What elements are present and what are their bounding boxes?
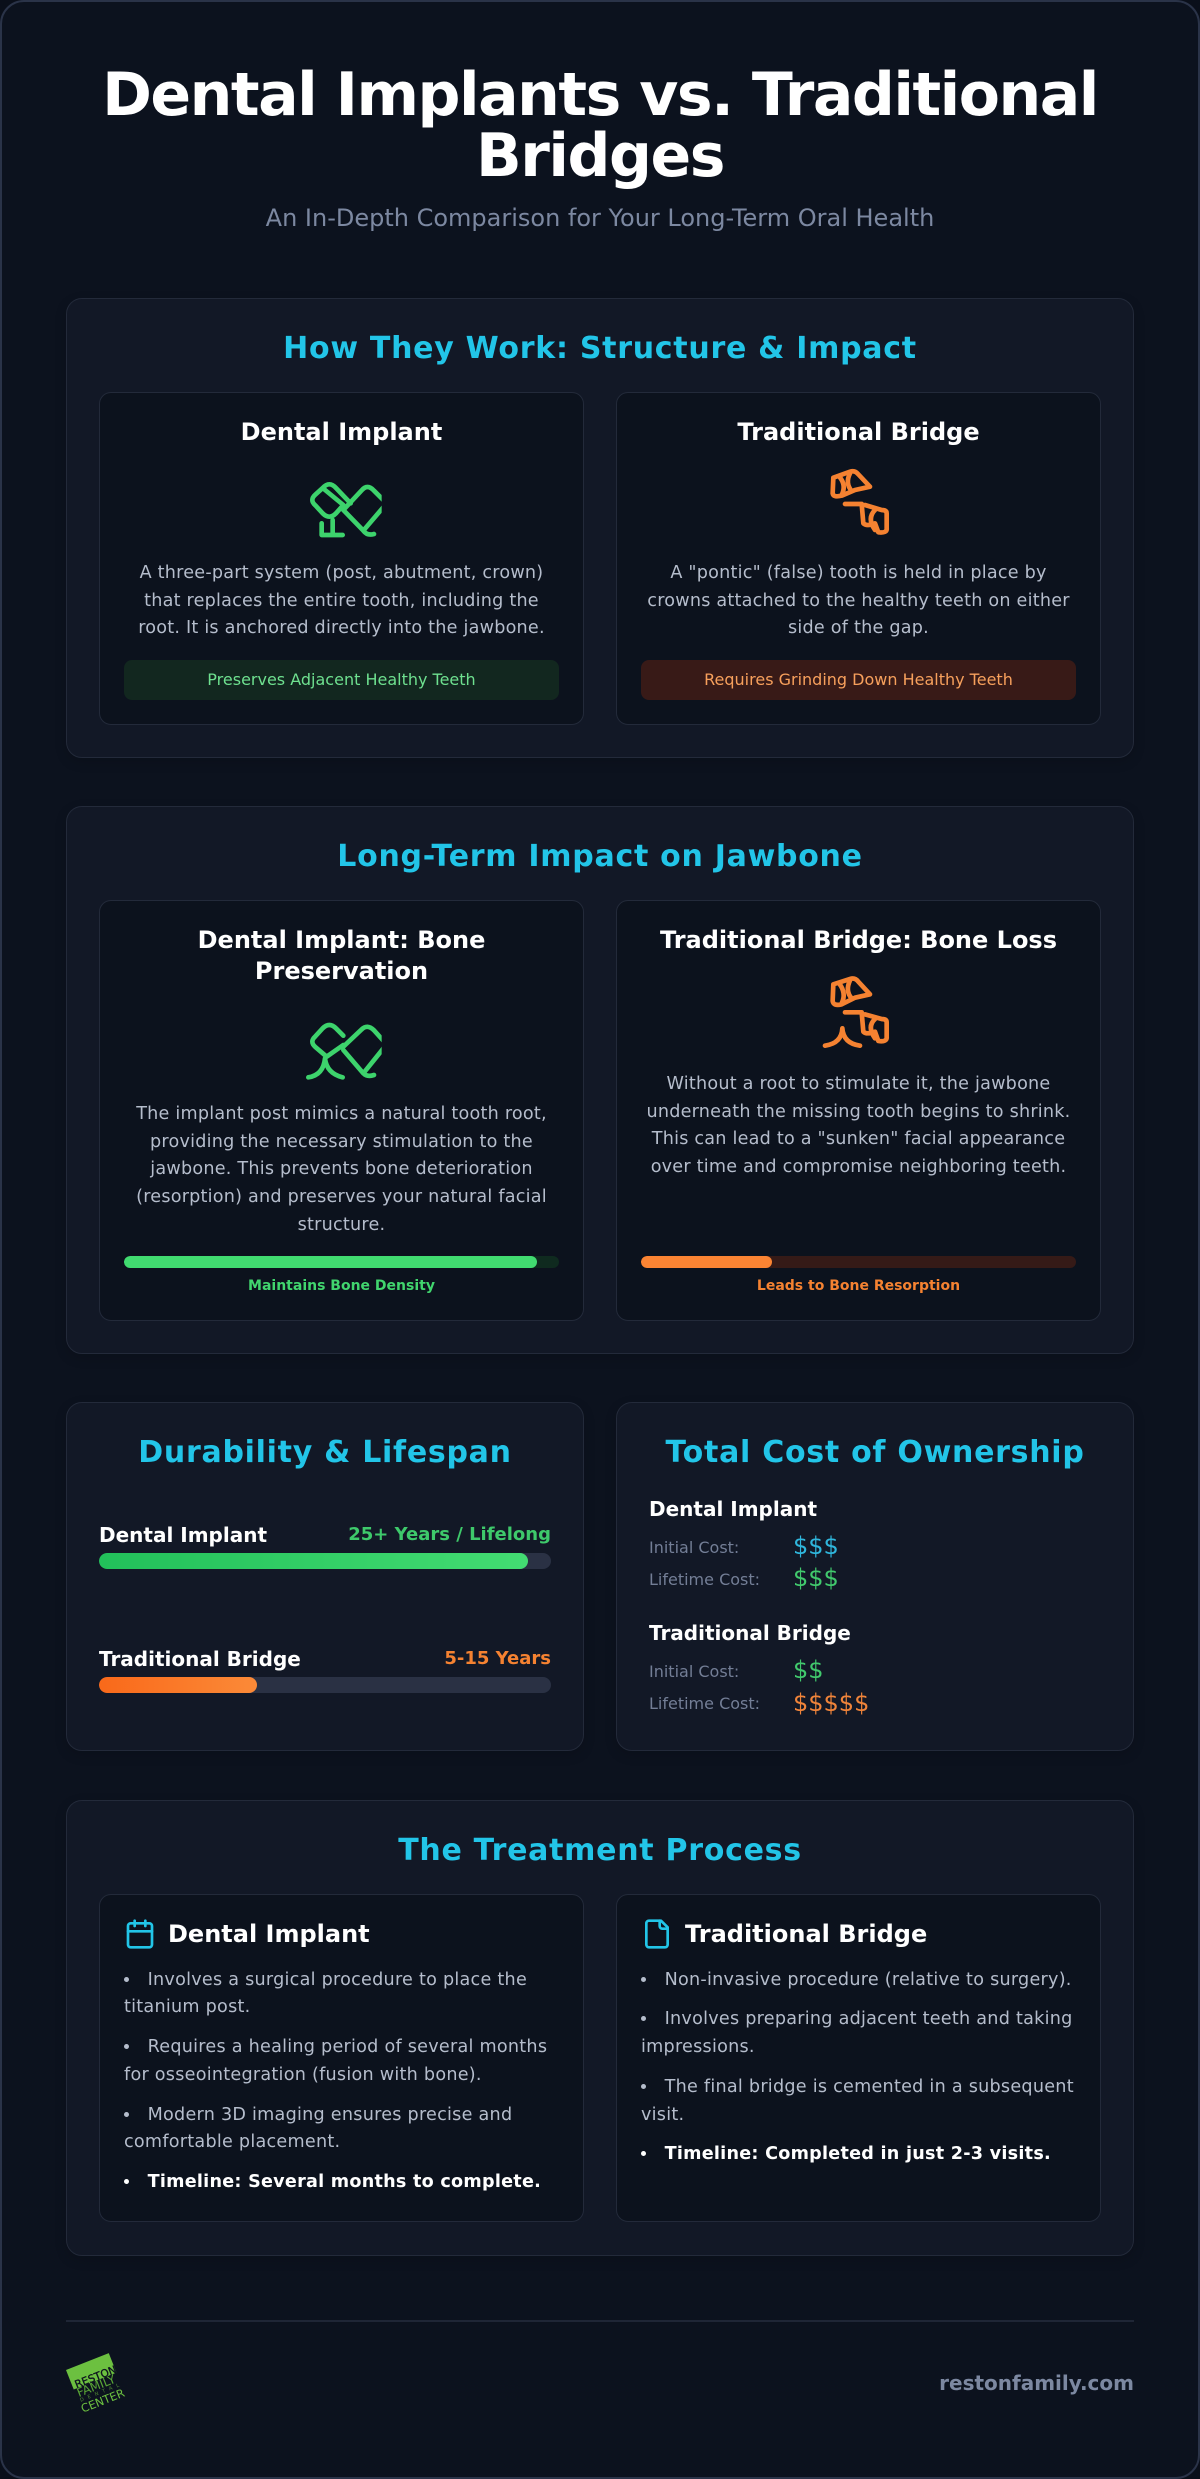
list: bridge steps: Non-invasive procedure (relative to surgery). — [665, 1970, 1072, 1990]
card title — [198, 926, 485, 984]
logo: Reston Family Dental Center — [66, 2353, 127, 2416]
list: implant steps: titanium post. — [124, 1997, 250, 2017]
list: implant steps: Involves a surgical procedure to place the — [148, 1970, 527, 1990]
row label: Initial Cost: — [649, 1662, 739, 1680]
subtitle: An In-Depth Comparison for Your Long-Term Oral Health — [266, 204, 934, 232]
list: implant steps: Requires a healing period of several months — [148, 2037, 547, 2057]
description: structure. — [298, 1215, 385, 1235]
icon: calendar — [126, 1919, 154, 1949]
description: A "pontic" (false) tooth is held in place by — [670, 563, 1047, 583]
heading: how they work: How They Work: Structure & Impact — [283, 330, 917, 366]
card title: Dental Implant: Bone — [198, 926, 485, 954]
list: implant steps: Timeline: Several months to complete. — [148, 2172, 541, 2192]
panel: cost — [616, 1402, 1134, 1751]
bar: bridge lifespan — [99, 1677, 551, 1693]
description: This can lead to a "sunken" facial appearance — [652, 1129, 1065, 1149]
website: restonfamily.com — [939, 2371, 1134, 2395]
bar: bone density — [124, 1256, 559, 1268]
description — [138, 563, 545, 638]
label: bridge: Traditional Bridge — [99, 1647, 301, 1671]
bar fill — [641, 1256, 772, 1268]
list: bridge steps: The final bridge is cemented in a subsequent — [665, 2077, 1074, 2097]
panel: jawbone impact — [66, 806, 1134, 1354]
list: bridge steps — [641, 1970, 1074, 2164]
description: root. It is anchored directly into the jawbone. — [138, 618, 545, 638]
icon: implant with root — [306, 1022, 382, 1080]
icon: bridge teeth — [830, 468, 890, 535]
panel: how they work — [66, 298, 1134, 758]
card: bridge bone loss — [616, 900, 1101, 1321]
card title: Dental Implant — [168, 1920, 370, 1948]
description: A three-part system (post, abutment, crown) — [140, 563, 543, 583]
description: crowns attached to the healthy teeth on either — [647, 591, 1070, 611]
card: traditional bridge structure — [616, 392, 1101, 725]
bar fill — [99, 1553, 528, 1569]
badge: preserves teeth — [124, 660, 559, 700]
card title: Traditional Bridge — [685, 1920, 927, 1948]
heading: jawbone: Long-Term Impact on Jawbone — [337, 838, 863, 874]
list: bridge steps: impressions. — [641, 2037, 755, 2057]
description: (resorption) and preserves your natural facial — [136, 1187, 547, 1207]
card title: Dental Implant — [241, 418, 442, 446]
icon: implant tooth — [310, 482, 382, 538]
description: jawbone. This prevents bone deterioration — [150, 1159, 533, 1179]
row label: Lifetime Cost: — [649, 1570, 760, 1588]
description: The implant post mimics a natural tooth root, — [136, 1104, 547, 1124]
card title: Preservation — [255, 956, 428, 984]
label: implant cost: Dental Implant — [649, 1497, 817, 1521]
badge: requires grinding: Requires Grinding Down Healthy Teeth — [704, 670, 1013, 689]
value: bridge lifespan: 5-15 Years — [444, 1648, 551, 1669]
bar label: Leads to Bone Resorption — [757, 1278, 960, 1294]
badge: preserves teeth: Preserves Adjacent Healthy Teeth — [207, 670, 476, 689]
value: implant lifespan: 25+ Years / Lifelong — [348, 1524, 551, 1545]
icon: document — [645, 1919, 669, 1949]
card: implant process — [99, 1894, 584, 2222]
description: Without a root to stimulate it, the jawbone — [667, 1074, 1050, 1094]
card: dental implant structure — [99, 392, 584, 725]
panel: treatment process — [66, 1800, 1134, 2256]
list: bridge steps: visit. — [641, 2104, 684, 2124]
label: bridge cost: Traditional Bridge — [649, 1621, 851, 1645]
label: implant: Dental Implant — [99, 1523, 267, 1547]
row label: Initial Cost: — [649, 1538, 739, 1556]
bar label: Maintains Bone Density — [248, 1278, 435, 1294]
list: implant steps: comfortable placement. — [124, 2132, 340, 2152]
description — [646, 1074, 1070, 1177]
description — [136, 1104, 547, 1235]
list: bridge steps: Timeline: Completed in just 2-3 visits. — [665, 2144, 1051, 2164]
logo: Reston Family Dental Center: DENTAL — [79, 2381, 124, 2403]
description: underneath the missing tooth begins to shrink. — [646, 1102, 1070, 1122]
heading: cost: Total Cost of Ownership — [665, 1434, 1085, 1470]
description: that replaces the entire tooth, including the — [144, 591, 539, 611]
title: Dental Implants vs. Traditional — [102, 60, 1098, 130]
list: bridge steps: Involves preparing adjacent teeth and taking — [665, 2009, 1073, 2029]
logo: Reston Family Dental Center: CENTER — [79, 2386, 127, 2416]
bar: bone resorption — [641, 1256, 1076, 1268]
bar fill — [124, 1256, 537, 1268]
row label: Lifetime Cost: — [649, 1694, 760, 1712]
description — [647, 563, 1070, 638]
card title: Traditional Bridge: Bone Loss — [660, 926, 1057, 954]
icon: bridge with root — [822, 976, 890, 1048]
panel: durability — [66, 1402, 584, 1751]
badge: requires grinding — [641, 660, 1076, 700]
card: implant bone preservation — [99, 900, 584, 1321]
logo: Reston Family Dental Center: RESTON — [73, 2363, 118, 2391]
row value: $$$ — [793, 1532, 839, 1560]
description: side of the gap. — [788, 618, 929, 638]
title: Bridges — [476, 121, 724, 191]
row value: $$ — [793, 1656, 824, 1684]
title — [102, 60, 1098, 191]
bar: implant lifespan — [99, 1553, 551, 1569]
description: over time and compromise neighboring teeth. — [651, 1157, 1066, 1177]
row value: $$$ — [793, 1564, 839, 1592]
row value: $$$$$ — [793, 1688, 869, 1716]
list: implant steps — [124, 1970, 547, 2192]
list: implant steps: for osseointegration (fusion with bone). — [124, 2065, 482, 2085]
heading: treatment: The Treatment Process — [398, 1832, 802, 1868]
logo: Reston Family Dental Center: FAMILY — [75, 2372, 117, 2399]
heading: durability: Durability & Lifespan — [138, 1434, 512, 1470]
list: implant steps: Modern 3D imaging ensures precise and — [148, 2104, 512, 2124]
card: bridge process — [616, 1894, 1101, 2222]
bar fill — [99, 1677, 257, 1693]
card title: Traditional Bridge — [737, 418, 980, 446]
description: providing the necessary stimulation to the — [150, 1132, 533, 1152]
